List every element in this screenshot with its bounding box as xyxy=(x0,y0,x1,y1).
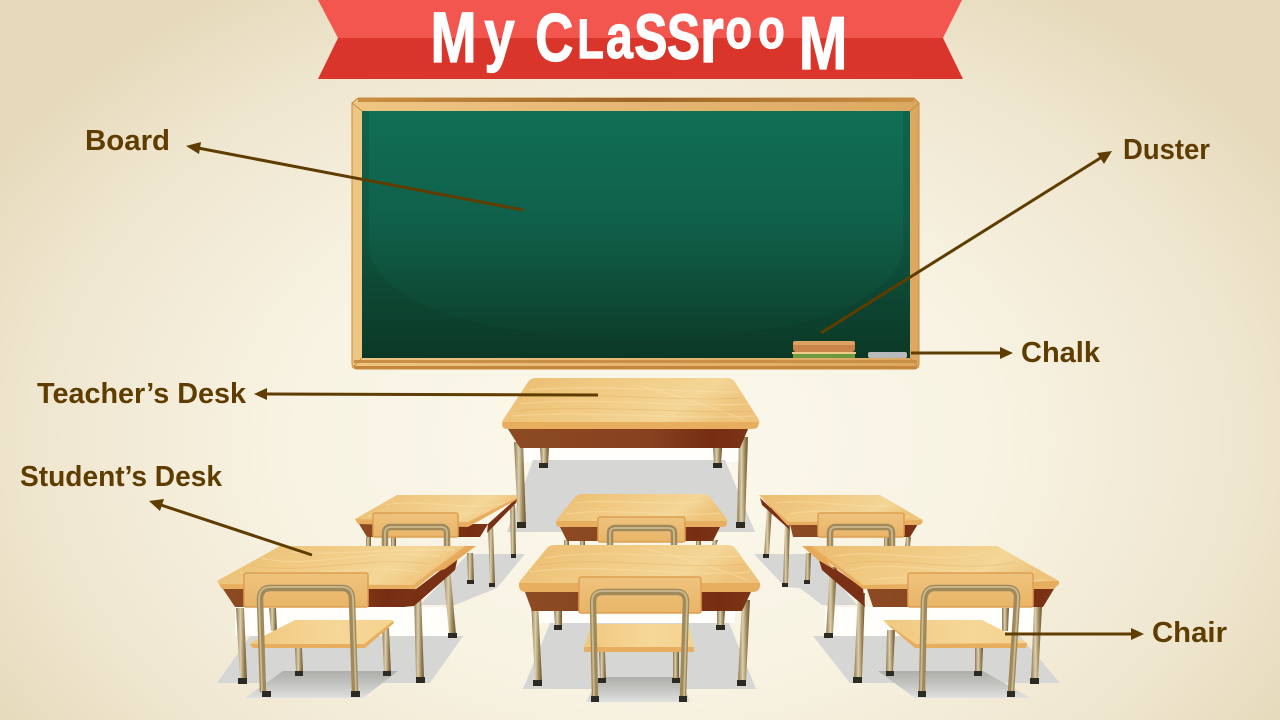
chair back xyxy=(818,513,904,546)
label: board: Board xyxy=(85,125,170,157)
title: S xyxy=(667,2,700,73)
title: C xyxy=(535,0,573,75)
back left student's desk xyxy=(355,495,518,587)
chair back xyxy=(598,517,685,546)
chalk xyxy=(868,352,907,358)
chair back xyxy=(373,513,458,546)
front left student's desk xyxy=(217,546,476,684)
board surface xyxy=(362,111,910,358)
label: duster: Duster xyxy=(1123,134,1210,166)
arrow: student's desk xyxy=(149,499,312,555)
front right chair xyxy=(878,573,1033,698)
front right student's desk xyxy=(802,546,1059,684)
front left chair xyxy=(244,573,398,698)
label: student's desk: Student’s Desk xyxy=(20,461,223,493)
arrow: duster xyxy=(821,151,1112,333)
title: M xyxy=(799,2,847,86)
front centre student's desk xyxy=(519,545,760,686)
label: chair: Chair xyxy=(1152,617,1227,649)
arrow: chalk xyxy=(911,347,1013,359)
label: teacher's desk: Teacher’s Desk xyxy=(37,378,247,410)
title: S xyxy=(634,2,667,73)
back right student's desk xyxy=(759,495,923,587)
arrow: teacher's desk xyxy=(254,388,598,400)
title: L xyxy=(577,8,604,70)
title: M xyxy=(431,0,477,78)
arrow: chair xyxy=(1005,628,1144,640)
chalkboard xyxy=(352,98,919,369)
shadows of desks xyxy=(217,448,1060,689)
back centre student's desk xyxy=(556,494,727,546)
title banner xyxy=(318,0,963,86)
arrow: board xyxy=(186,142,523,210)
teacher's desk xyxy=(502,378,760,528)
title: a xyxy=(606,2,634,71)
front centre chair xyxy=(579,577,701,702)
label: chalk: Chalk xyxy=(1021,337,1101,369)
duster xyxy=(792,341,856,358)
